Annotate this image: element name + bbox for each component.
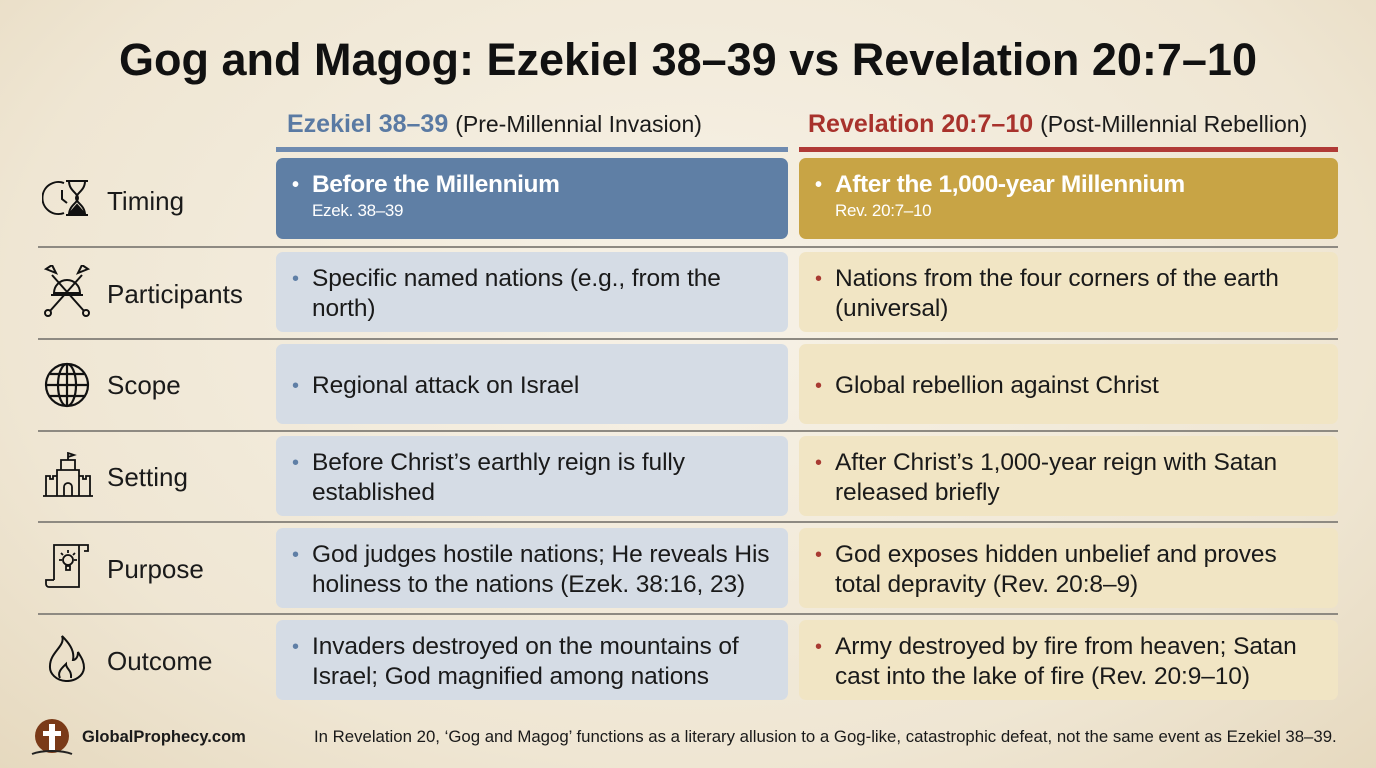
card: Ezekiel purpose (276, 528, 788, 608)
card: Revelation participants: Nations from the four corners of the earth (835, 265, 1279, 292)
card: Revelation outcome: • (815, 636, 822, 658)
card: Revelation scope: • (815, 375, 822, 397)
card: Revelation timing (799, 158, 1338, 239)
card: Revelation purpose: total depravity (Rev. 20:8–9) (835, 571, 1138, 598)
card: Ezekiel timing: Before the Millennium (312, 171, 560, 198)
card: Revelation purpose: God exposes hidden unbelief and proves (835, 541, 1277, 568)
label: Outcome (107, 646, 212, 676)
column header: Revelation: Revelation 20:7–10 (Post-Millennial Rebellion) (808, 110, 1307, 138)
icon: clock hourglass (42, 180, 88, 216)
icon: castle (43, 452, 93, 497)
card: Revelation outcome: Army destroyed by fire from heaven; Satan (835, 633, 1297, 660)
label: Scope (107, 370, 181, 400)
title: Gog and Magog: Ezekiel 38–39 vs Revelation 20:7–10 (119, 34, 1257, 85)
card: Revelation outcome (799, 620, 1338, 700)
card: Ezekiel setting: Before Christ’s earthly reign is fully (312, 449, 685, 476)
card: Ezekiel scope: Regional attack on Israel (312, 372, 579, 399)
card: Ezekiel outcome: • (292, 636, 299, 658)
label: Participants (107, 279, 243, 309)
card: Revelation timing: After the 1,000-year Millennium (835, 171, 1185, 198)
card: Revelation scope (799, 344, 1338, 424)
icon: helmet swords (44, 265, 90, 317)
card: Ezekiel setting: • (292, 452, 299, 474)
card: Revelation purpose (799, 528, 1338, 608)
row: Participants (44, 265, 243, 317)
row: Purpose (45, 544, 204, 588)
logo (32, 719, 246, 755)
label: Purpose (107, 554, 204, 584)
card: Ezekiel outcome: Invaders destroyed on the mountains of (312, 633, 739, 660)
card: Revelation participants (799, 252, 1338, 332)
label: Timing (107, 186, 184, 216)
card: Ezekiel participants: • (292, 268, 299, 290)
card: Revelation setting (799, 436, 1338, 516)
card: Revelation scope: Global rebellion against Christ (835, 372, 1159, 399)
card: Ezekiel purpose: God judges hostile nations; He reveals His (312, 541, 769, 568)
column header: Ezekiel: Ezekiel 38–39 (Pre-Millennial Invasion) (287, 110, 702, 138)
logo: GlobalProphecy.com (82, 728, 246, 746)
card: Ezekiel scope (276, 344, 788, 424)
card: Revelation participants: • (815, 268, 822, 290)
card: Revelation timing: Rev. 20:7–10 (835, 201, 931, 220)
card: Revelation outcome: cast into the lake of fire (Rev. 20:9–10) (835, 663, 1250, 690)
card: Ezekiel setting: established (312, 479, 435, 506)
icon: globe (44, 362, 90, 408)
card: Ezekiel scope: • (292, 375, 299, 397)
card: Ezekiel timing (276, 158, 788, 239)
card: Ezekiel outcome: Israel; God magnified among nations (312, 663, 709, 690)
card: Ezekiel setting (276, 436, 788, 516)
card: Revelation setting: released briefly (835, 479, 1000, 506)
card: Revelation timing: • (815, 174, 822, 196)
card: Ezekiel participants: north) (312, 295, 375, 322)
row: Scope (44, 362, 181, 408)
card: Ezekiel timing: Ezek. 38–39 (312, 201, 403, 220)
card: Ezekiel purpose: holiness to the nations (Ezek. 38:16, 23) (312, 571, 745, 598)
card: Ezekiel timing: • (292, 174, 299, 196)
row: Outcome (48, 635, 212, 682)
card: Ezekiel participants: Specific named nations (e.g., from the (312, 265, 721, 292)
card: Revelation participants: (universal) (835, 295, 948, 322)
row: Setting (43, 452, 188, 497)
card: Ezekiel participants (276, 252, 788, 332)
card: Revelation setting: • (815, 452, 822, 474)
footnote: In Revelation 20, ‘Gog and Magog’ functions as a literary allusion to a Gog-like, catastrophic defeat, not the same event as Ezekiel 38–39. (314, 727, 1337, 746)
card: Revelation setting: After Christ’s 1,000-year reign with Satan (835, 449, 1277, 476)
icon: cross logo (32, 719, 72, 755)
icon: flame (48, 635, 85, 682)
label: Setting (107, 462, 188, 492)
card: Ezekiel purpose: • (292, 544, 299, 566)
card: Revelation purpose: • (815, 544, 822, 566)
icon: scroll lightbulb (45, 544, 89, 588)
row: Timing (42, 180, 184, 216)
card: Ezekiel outcome (276, 620, 788, 700)
